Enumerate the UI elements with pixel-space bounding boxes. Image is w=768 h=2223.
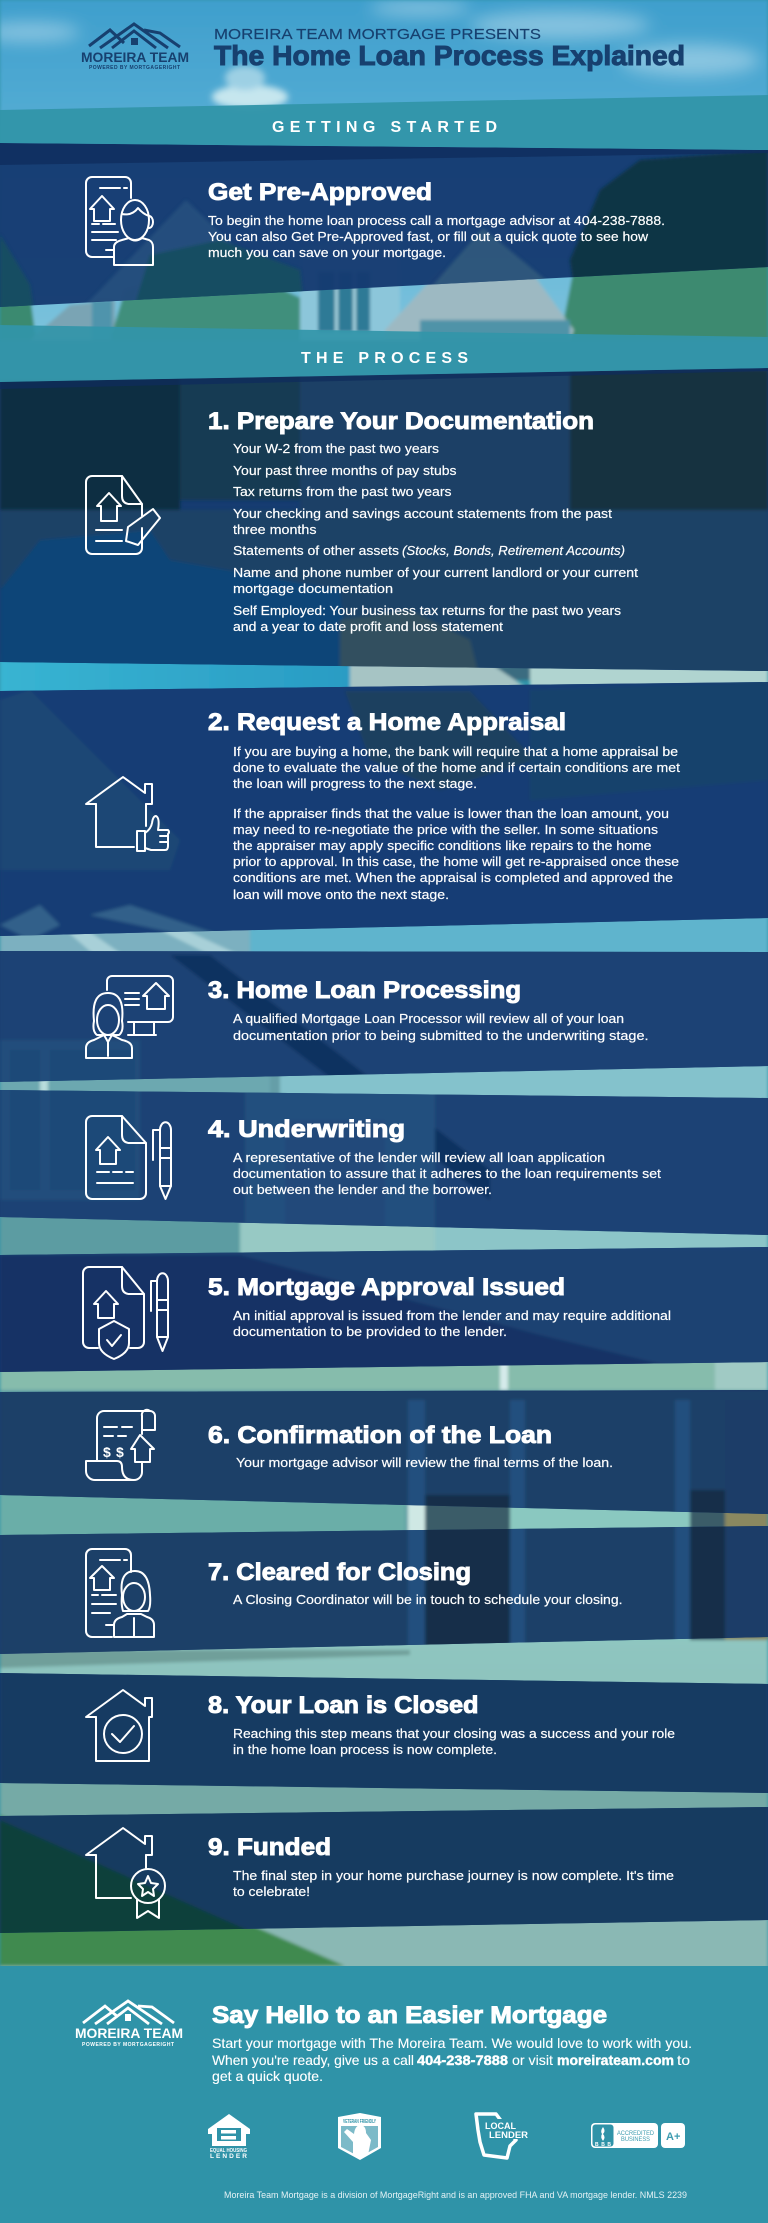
text: Your mortgage advisor will review the final terms of the loan.: [236, 1456, 613, 1470]
badge: BBB accredited: BBB: [595, 2142, 611, 2148]
checklist: Statements of other assets: [233, 544, 399, 558]
step 7: [86, 1549, 622, 1637]
footer panel: [0, 1966, 768, 2223]
checklist: and a year to date profit and loss statement: [233, 620, 504, 634]
heading: 5. Mortgage Approval Issued: [208, 1274, 565, 1301]
text: To begin the home loan process call a mortgage advisor at 404-238-7888.: [208, 214, 665, 228]
text: An initial approval is issued from the lender and may require additional: [233, 1309, 671, 1323]
badge: BBB accredited: ACCREDITED: [617, 2131, 655, 2137]
text: The final step in your home purchase journey is now complete. It's time: [233, 1869, 674, 1883]
step 6: [86, 1410, 613, 1480]
footer logo: [75, 2001, 183, 2048]
text: [233, 745, 681, 902]
logo: Moreira Team: POWERED BY MORTGAGERIGHT: [89, 65, 180, 71]
section band: getting started: GETTING STARTED: [272, 119, 497, 136]
checklist: (Stocks, Bonds, Retirement Accounts): [402, 544, 625, 558]
icon: house with star medal: [86, 1828, 165, 1918]
heading: 7. Cleared for Closing: [208, 1559, 471, 1586]
checklist: Your past three months of pay stubs: [233, 464, 456, 478]
icon: document, shield and pen: [83, 1267, 168, 1359]
text: A qualified Mortgage Loan Processor will review all of your loan: [233, 1012, 624, 1026]
text: [233, 1727, 675, 1757]
badge: equal housing lender: LENDER: [210, 2153, 247, 2160]
dollar glyphs: [103, 1444, 124, 1460]
icon: phone with closing coordinator: [86, 1549, 154, 1637]
icon: document with pencil: [86, 476, 160, 554]
text: conditions are met. When the appraisal is completed and approved the: [233, 871, 673, 885]
heading: 2. Request a Home Appraisal: [208, 709, 566, 736]
text: loan will move onto the next stage.: [233, 888, 449, 902]
text: [233, 1151, 662, 1197]
badge: local lender, Georgia outline: LOCAL: [485, 2121, 516, 2132]
step 1: [86, 408, 639, 634]
text: A representative of the lender will review all loan application: [233, 1151, 605, 1165]
icon: document and pen: [86, 1116, 171, 1199]
footer text: 404-238-7888: [417, 2052, 508, 2068]
text: [233, 1869, 674, 1899]
heading: 8. Your Loan is Closed: [208, 1692, 478, 1719]
footer text: [212, 2035, 692, 2084]
footer text: moreirateam.com: [557, 2052, 674, 2068]
text: [208, 214, 665, 260]
checklist: [233, 442, 639, 634]
heading: Get Pre-Approved: [208, 179, 432, 206]
checklist: Name and phone number of your current landlord or your current: [233, 566, 639, 580]
header section: [81, 24, 685, 71]
badge: equal housing lender: EQUAL HOUSING: [210, 2148, 247, 2154]
icon: scroll with dollars and house: [86, 1410, 155, 1480]
heading: 1. Prepare Your Documentation: [208, 408, 594, 435]
panel: get pre-approved: [86, 177, 665, 265]
text: documentation to assure that it adheres to the loan requirements set: [233, 1167, 662, 1181]
footer heading: Say Hello to an Easier Mortgage: [212, 2002, 607, 2029]
checklist: mortgage documentation: [233, 582, 393, 596]
text: done to evaluate the value of the home and if certain conditions are met: [233, 761, 681, 775]
badge: BBB accredited: BUSINESS: [621, 2137, 650, 2143]
checklist: Tax returns from the past two years: [233, 485, 452, 499]
footer text: to: [677, 2052, 690, 2068]
text: prior to approval. In this case, the home will get re-appraised once these: [233, 855, 679, 869]
footer text: or visit: [512, 2052, 553, 2068]
pre-title: MOREIRA TEAM MORTGAGE PRESENTS: [214, 26, 541, 43]
badge: BBB accredited: A+: [666, 2131, 680, 2143]
text: out between the lender and the borrower.: [233, 1183, 492, 1197]
fine print: Moreira Team Mortgage is a division of MortgageRight and is an approved FHA and VA mortgage lender. NMLS 2239: [224, 2190, 687, 2201]
section band: the process: THE PROCESS: [301, 350, 468, 367]
dark band shadows: [0, 143, 768, 389]
text: the appraiser may apply specific conditions like repairs to the home: [233, 839, 652, 853]
badge: local lender, Georgia outline: LENDER: [489, 2130, 528, 2141]
text: You can also Get Pre-Approved fast, or fill out a quick quote to see how: [208, 230, 649, 244]
logo: Moreira Team: MOREIRA TEAM: [81, 50, 189, 65]
title: The Home Loan Process Explained: [214, 40, 685, 71]
step 4: [86, 1116, 662, 1199]
footer text: When you're ready, give us a call: [212, 2052, 414, 2068]
text: If you are buying a home, the bank will require that a home appraisal be: [233, 745, 678, 759]
checklist: Your checking and savings account statements from the past: [233, 507, 613, 521]
step 5: [83, 1267, 671, 1359]
heading: 6. Confirmation of the Loan: [208, 1422, 552, 1449]
footer logo: MOREIRA TEAM: [75, 2026, 183, 2041]
checklist: Your W-2 from the past two years: [233, 442, 439, 456]
text: to celebrate!: [233, 1885, 310, 1899]
text: [233, 1012, 648, 1043]
badge: local lender, Georgia outline: [476, 2114, 528, 2158]
step 3: [86, 976, 648, 1058]
badge: BBB accredited: [591, 2123, 685, 2148]
text: much you can save on your mortgage.: [208, 246, 446, 260]
step 2: [86, 709, 681, 902]
text: [233, 1309, 671, 1339]
text: may need to re-negotiate the price with the seller. In some situations: [233, 823, 658, 837]
text: documentation to be provided to the lender.: [233, 1325, 507, 1339]
dollar glyphs: $: [103, 1444, 111, 1460]
icon: house with check: [86, 1690, 152, 1761]
heading: 9. Funded: [208, 1834, 331, 1861]
dollar glyphs: $: [116, 1444, 124, 1460]
text: the loan will progress to the next stage.: [233, 777, 477, 791]
badge: equal housing lender: [208, 2114, 250, 2160]
icon: processor at monitor: [86, 976, 173, 1058]
section band: the process: [0, 325, 768, 382]
footer text: Start your mortgage with The Moreira Team. We would love to work with you.: [212, 2035, 692, 2051]
logo: Moreira Team: [81, 24, 189, 71]
text: documentation prior to being submitted to the underwriting stage.: [233, 1029, 648, 1043]
text: in the home loan process is now complete.: [233, 1743, 497, 1757]
section band: getting started: [0, 95, 768, 150]
step 9: [86, 1828, 674, 1918]
text: Reaching this step means that your closing was a success and your role: [233, 1727, 675, 1741]
icon: house with thumbs up: [86, 777, 169, 851]
heading: 4. Underwriting: [208, 1116, 405, 1143]
checklist: Self Employed: Your business tax returns for the past two years: [233, 604, 621, 618]
checklist: three months: [233, 523, 316, 537]
heading: 3. Home Loan Processing: [208, 977, 521, 1004]
icon: phone with advisor: [86, 177, 153, 265]
step 8: [86, 1690, 675, 1761]
badge: veteran friendly: [338, 2113, 381, 2160]
footer text: get a quick quote.: [212, 2068, 323, 2084]
text: A Closing Coordinator will be in touch to schedule your closing.: [233, 1593, 622, 1607]
badge: veteran friendly: VETERAN FRIENDLY: [343, 2119, 376, 2125]
text: If the appraiser finds that the value is lower than the loan amount, you: [233, 807, 669, 821]
footer logo: POWERED BY MORTGAGERIGHT: [82, 2042, 174, 2048]
